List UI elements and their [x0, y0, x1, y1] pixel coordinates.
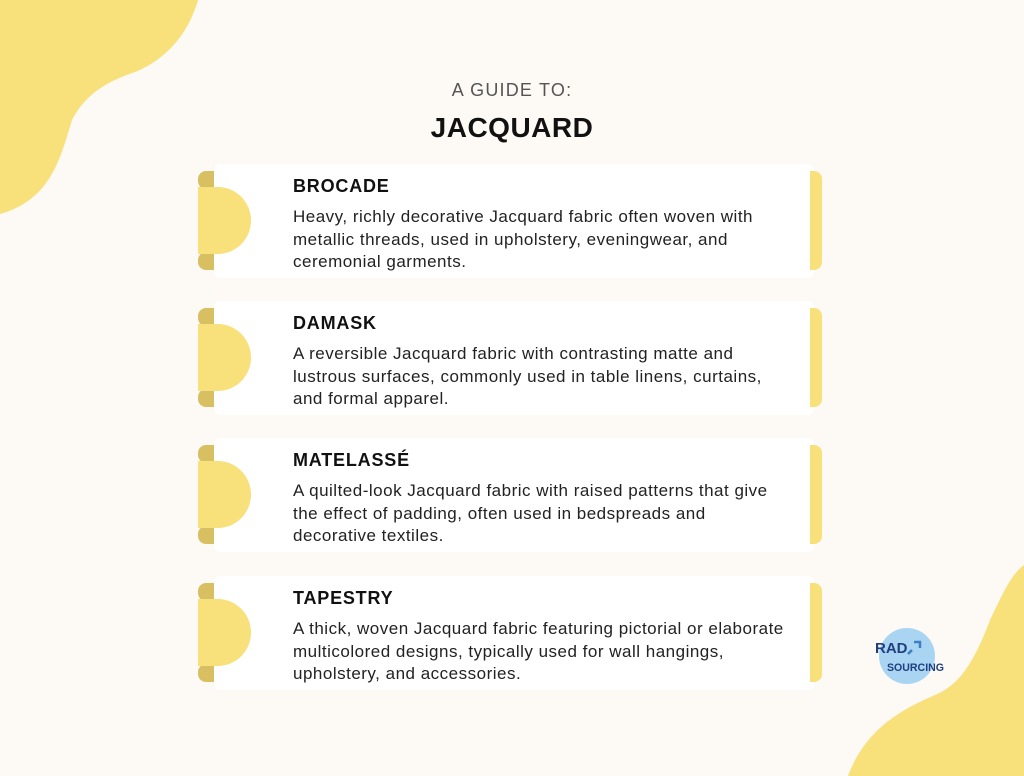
logo: rad sourcing [875, 628, 944, 684]
text: damask: and formal apparel. [293, 389, 449, 408]
heading: damask: DAMASK [293, 313, 377, 333]
title: JACQUARD [431, 112, 593, 143]
text: brocade: metallic threads, used in upholstery, eveningwear, and [293, 230, 728, 248]
text: tapestry: upholstery, and accessories. [293, 664, 521, 683]
text: brocade: ceremonial garments. [293, 252, 466, 271]
logo: rad sourcing: SOURCING [887, 662, 944, 674]
blob: bottom-right [848, 565, 1024, 776]
subtitle: A GUIDE TO: [452, 80, 572, 100]
logo: rad sourcing: RAD [875, 640, 908, 657]
panel: damask [198, 301, 822, 415]
blob: top-left [0, 0, 198, 214]
panel: tapestry [198, 576, 822, 690]
text: tapestry: multicolored designs, typically used for wall hangings, [293, 642, 724, 660]
text: matelasse: A quilted-look Jacquard fabric with raised patterns that give [293, 481, 768, 500]
text: damask [293, 344, 762, 408]
text: tapestry [293, 619, 784, 683]
text: damask: lustrous surfaces, commonly used in table linens, curtains, [293, 366, 762, 386]
text: tapestry: A thick, woven Jacquard fabric featuring pictorial or elaborate [293, 619, 784, 638]
text: matelasse: decorative textiles. [293, 526, 444, 545]
panel: matelasse [198, 438, 822, 552]
text: brocade: Heavy, richly decorative Jacquard fabric often woven with [293, 207, 753, 226]
heading: matelasse: MATELASSÉ [293, 450, 410, 470]
text: brocade [293, 207, 753, 271]
panel: brocade [198, 164, 822, 278]
text: damask: A reversible Jacquard fabric with contrasting matte and [293, 344, 733, 363]
text: matelasse: the effect of padding, often used in bedspreads and [293, 504, 706, 522]
text: matelasse [293, 481, 768, 545]
heading: tapestry: TAPESTRY [293, 588, 393, 608]
heading: brocade: BROCADE [293, 176, 390, 196]
